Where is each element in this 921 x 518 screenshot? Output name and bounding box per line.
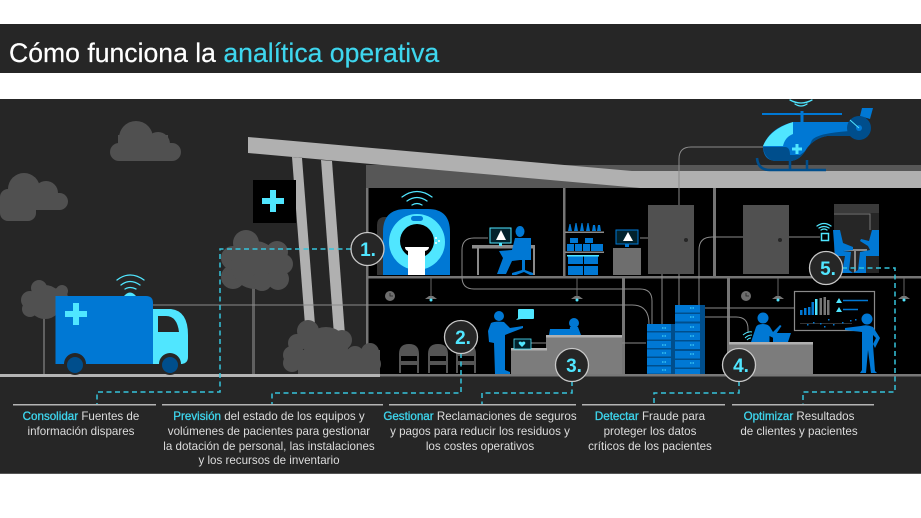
workstation with monitor and seated person: [472, 226, 535, 275]
step marker 2: 2.: [455, 328, 471, 349]
icon: cloud upper: [110, 121, 181, 161]
caption: Detectar: Detectar Fraude para: [595, 410, 705, 423]
caption: Gestionar: Gestionar Reclamaciones de seguros: [383, 410, 577, 423]
step marker 3: [556, 348, 588, 382]
step marker 5: 5.: [820, 259, 836, 280]
step marker 5: [810, 252, 842, 284]
thin connector lines: [153, 147, 820, 343]
roof: [248, 137, 921, 188]
columns: [292, 157, 345, 335]
building interior: [366, 165, 921, 374]
step marker 2: [444, 320, 478, 354]
caption: Optimizar: de clientes y pacientes: [740, 425, 858, 438]
icon: speech bubble: [516, 309, 534, 320]
caption: Consolidar: información dispares: [28, 425, 135, 438]
meeting room with two people: [817, 204, 879, 273]
ambulance: [56, 275, 188, 375]
dashed connectors: [97, 249, 895, 404]
step marker 4: 4.: [733, 356, 749, 377]
icon: ambulance wifi: [117, 275, 144, 289]
server rack 1: [647, 324, 675, 374]
icon: scanner wifi: [402, 192, 432, 205]
caption: Gestionar: y pagos para reducir los residuos y: [390, 425, 570, 438]
caption: Consolidar: Consolidar Fuentes de: [23, 410, 139, 423]
caption: Gestionar: los costes operativos: [426, 440, 534, 453]
server rack 2: [675, 305, 705, 374]
caption: Optimizar: Optimizar Resultados: [744, 410, 854, 423]
caption: Detectar: críticos de los pacientes: [588, 440, 712, 453]
step marker 4: [722, 348, 756, 382]
step marker 1: [351, 232, 384, 266]
caption: Previsión: Previsión del estado de los equipos y: [173, 410, 365, 423]
alert monitor on cabinet: [613, 230, 641, 275]
MRI scanner: [377, 192, 450, 275]
title: Cómo funciona la analítica operativa: [9, 38, 439, 68]
waiting room chairs: [399, 344, 476, 373]
caption: Previsión: la dotación de personal, las instalaciones: [163, 440, 375, 453]
icon: bush: [283, 320, 381, 374]
supply shelves: [565, 223, 604, 275]
step marker 3: 3.: [566, 356, 582, 377]
icon: desk wifi: [743, 332, 752, 340]
caption: Previsión: y los recursos de inventario: [198, 454, 340, 467]
ceiling lamps: [425, 278, 910, 302]
doors: [648, 205, 789, 274]
icon: device wifi: [817, 224, 831, 240]
icon: helicopter wifi: [790, 100, 812, 106]
icon: large tree: [221, 230, 293, 375]
icon: hospital sign: [253, 180, 296, 223]
presenter figure: [845, 314, 880, 373]
step marker 1: 1.: [360, 240, 376, 261]
helicopter: [757, 100, 873, 170]
icon: small tree: [21, 280, 68, 375]
analytics dashboard: [794, 292, 874, 330]
analyst desk with laptop and person: [729, 312, 813, 374]
caption: Previsión: volúmenes de pacientes para gestionar: [168, 425, 370, 438]
title bar: [0, 24, 921, 73]
reception desk with staff: [488, 309, 622, 374]
wall clocks: [385, 291, 751, 301]
caption: Detectar: proteger los datos: [604, 425, 697, 438]
caption rules: [13, 404, 874, 406]
icon: cloud left: [0, 173, 68, 221]
road: [0, 374, 380, 377]
main illustration panel: [0, 99, 921, 474]
